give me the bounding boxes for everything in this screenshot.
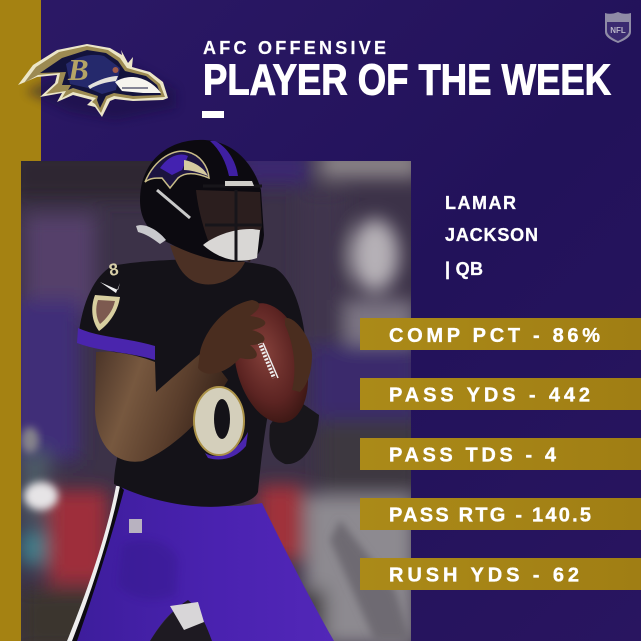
pants side stripe [68, 484, 124, 641]
stat bar: rush yds [360, 558, 641, 590]
pants NFL patch [129, 519, 142, 533]
stat bar: comp pct [360, 318, 641, 350]
swoosh [100, 282, 120, 293]
cleat [170, 602, 204, 630]
neck [170, 245, 245, 285]
blurred stadium photo [10, 150, 420, 641]
gap between legs [150, 600, 212, 641]
pants [76, 484, 334, 641]
stat bar: pass yds: PASS YDS - 442 [389, 384, 590, 406]
player figure [67, 140, 334, 641]
stat bar: pass tds: PASS TDS - 4 [389, 444, 557, 466]
stat bars [360, 318, 641, 590]
accent dash [202, 111, 224, 118]
icon: NFL shield: NFL [610, 26, 626, 35]
chin strap [136, 225, 166, 244]
facemask and face [196, 190, 262, 262]
jersey torso [78, 260, 306, 507]
player name: JACKSON [445, 225, 538, 245]
player name: | QB [445, 259, 483, 279]
logo letter B: B [67, 52, 89, 87]
stat bar: pass rtg [360, 498, 641, 530]
logo: Ravens head [18, 44, 176, 120]
sleeve trim [77, 328, 155, 360]
stat bar: pass yds [360, 378, 641, 410]
helmet raven decal [145, 151, 209, 188]
stat bar: pass tds [360, 438, 641, 470]
stat bar: pass rtg: PASS RTG - 140.5 [389, 504, 591, 526]
stat bar: comp pct: COMP PCT - 86% [389, 325, 600, 347]
player name [445, 193, 538, 279]
right arm with tattoos [95, 350, 228, 462]
gold side stripe [0, 0, 41, 641]
hands [198, 300, 265, 374]
thigh shading [118, 540, 178, 600]
football [222, 295, 320, 431]
jersey number 8 [194, 387, 248, 460]
label: AFC offensive: AFC OFFENSIVE [203, 38, 386, 58]
sleeve patch [92, 295, 120, 331]
icon: NFL shield [605, 12, 631, 43]
helmet shell [140, 140, 264, 262]
player name: LAMAR [445, 193, 516, 213]
stat bar: rush yds: RUSH YDS - 62 [389, 564, 579, 586]
helmet stripe [210, 141, 238, 176]
shoulder number: 8 [107, 260, 120, 280]
left forearm sleeve [269, 395, 319, 464]
